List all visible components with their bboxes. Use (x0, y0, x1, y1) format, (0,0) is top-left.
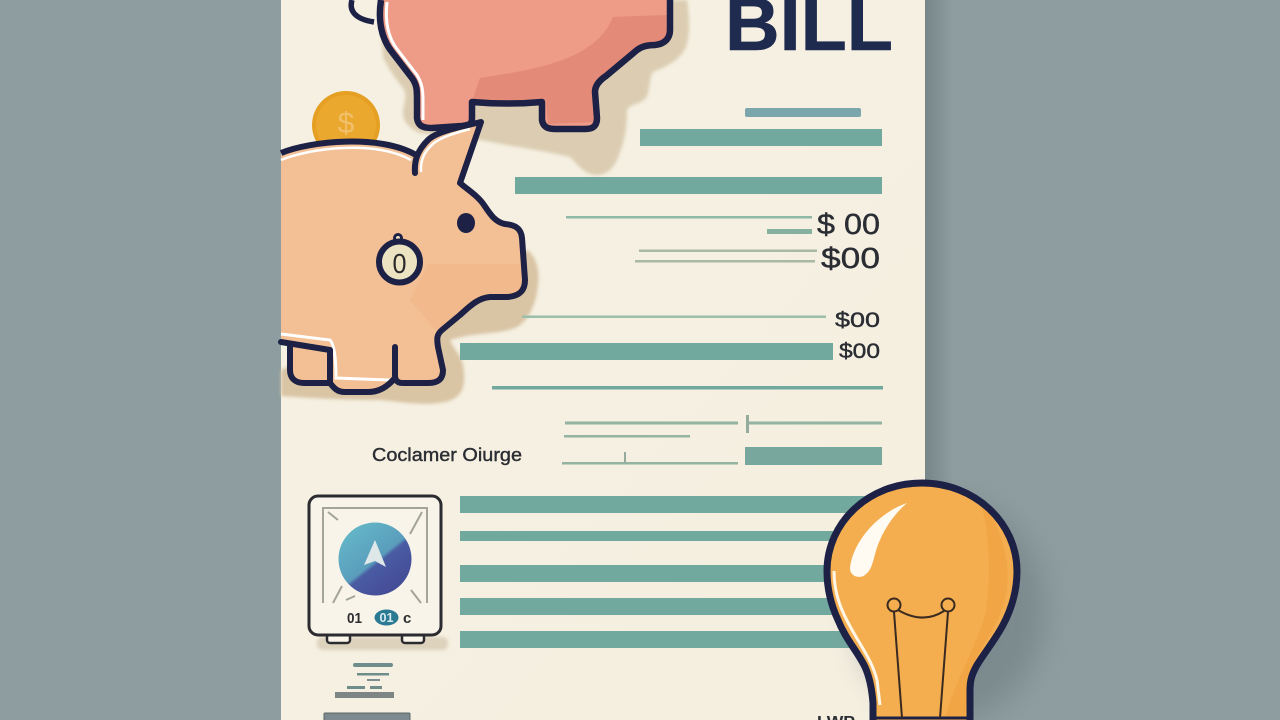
bill line items (460, 108, 883, 465)
icon: light bulb (827, 483, 1017, 720)
icon: peach piggy bank (281, 122, 539, 404)
small footer lines (324, 663, 410, 720)
pig eye (457, 213, 475, 233)
price labels: $ 00 (817, 209, 880, 241)
meter readout: c (403, 610, 411, 627)
meter readout: 01 (347, 610, 362, 627)
meter readout: 01 (380, 610, 394, 625)
icon: gold coin: $ (338, 107, 355, 140)
customer charge label: Coclamer Oiurge (372, 445, 522, 465)
infographic canvas (278, 0, 1047, 720)
lower summary bars (460, 496, 875, 648)
price labels: $00 (839, 340, 880, 363)
pig medallion: 0 (392, 248, 406, 279)
meter readout (347, 610, 411, 627)
pig medallion (379, 234, 420, 282)
price labels: $00 (821, 243, 880, 275)
price labels: $00 (835, 309, 880, 332)
bulb shadow (855, 500, 1045, 720)
bulb filament (888, 598, 954, 718)
icon: coral piggy bank (351, 0, 689, 175)
price labels (817, 209, 880, 363)
paper shadow (925, 0, 953, 720)
gauge dial (338, 522, 412, 596)
icon: meter box (309, 496, 448, 650)
icon: gold coin (312, 91, 380, 142)
bill paper (281, 0, 925, 720)
